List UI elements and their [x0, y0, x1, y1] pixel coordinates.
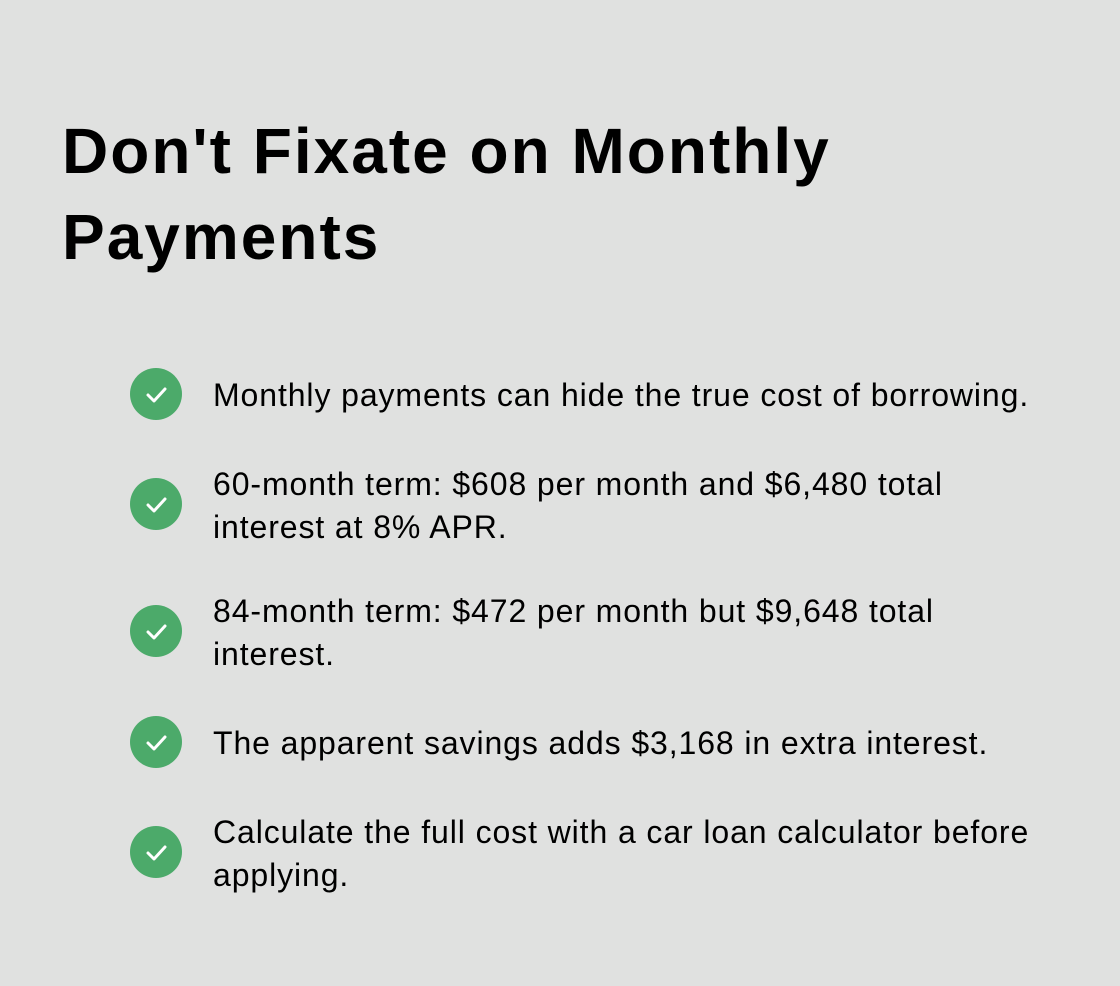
item 4 [130, 716, 988, 768]
item 1 [130, 368, 1029, 420]
text: 60-month term: $608 per month and $6,480 total [213, 466, 943, 502]
text: applying. [213, 857, 349, 893]
text [213, 814, 1029, 893]
item 5 [130, 814, 1029, 893]
icon: check [130, 478, 182, 530]
text: interest at 8% APR. [213, 509, 508, 545]
icon: check [130, 605, 182, 657]
text: 84-month term: $472 per month but $9,648 total [213, 593, 934, 629]
item 2 [130, 466, 943, 545]
icon: check [130, 826, 182, 878]
text [213, 466, 943, 545]
title: Don't Fixate on Monthly [62, 115, 831, 187]
text: interest. [213, 636, 335, 672]
text [213, 593, 934, 672]
title: Payments [62, 201, 380, 273]
item 3 [130, 593, 934, 672]
title [62, 115, 831, 273]
icon: check [130, 368, 182, 420]
icon: check [130, 716, 182, 768]
text: Calculate the full cost with a car loan calculator before [213, 814, 1029, 850]
text: Monthly payments can hide the true cost of borrowing. [213, 377, 1029, 413]
text: The apparent savings adds $3,168 in extra interest. [213, 725, 988, 761]
